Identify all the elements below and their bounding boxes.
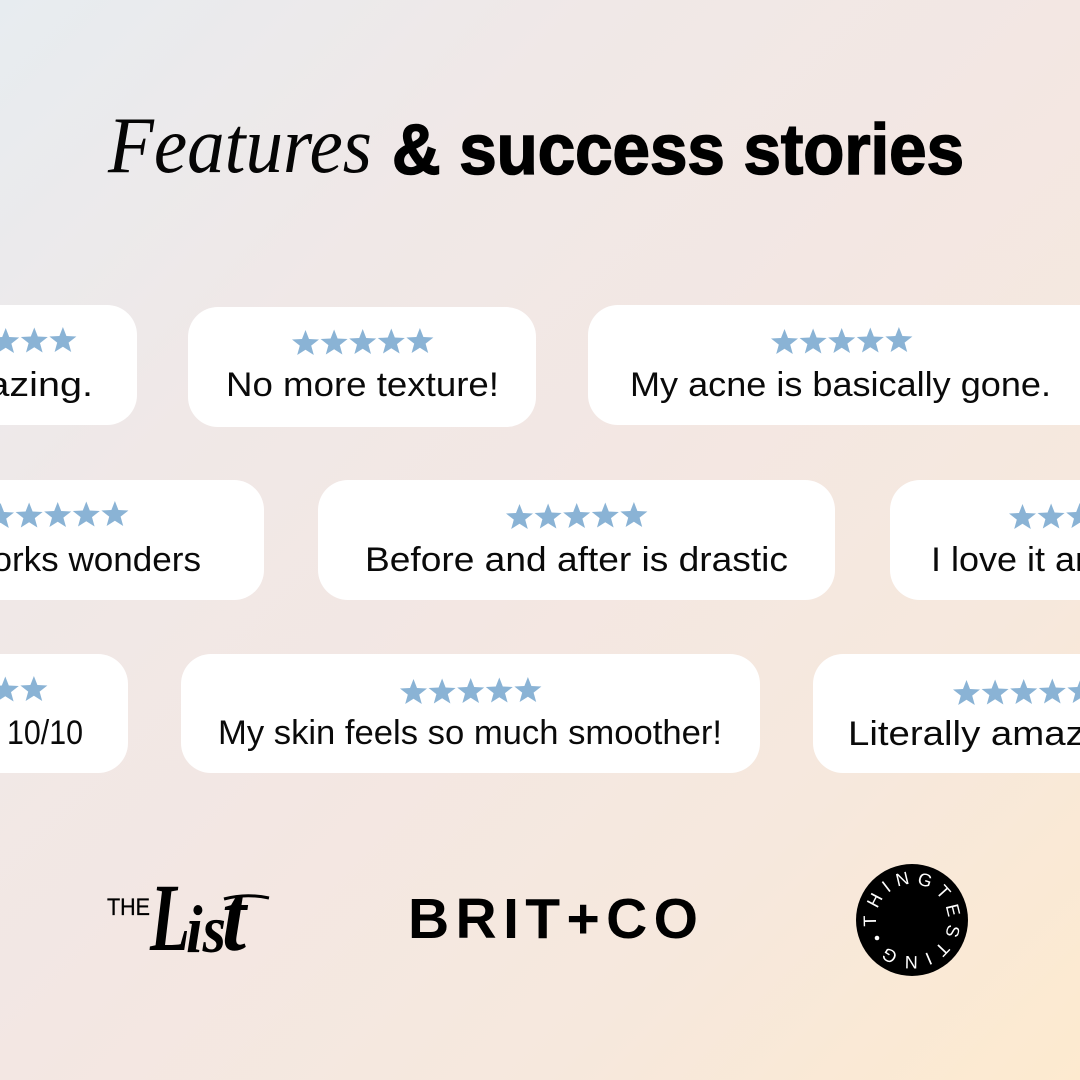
review card: acne gone [588, 305, 1080, 425]
review card: literally amazing [813, 654, 1080, 773]
review card: no more texture [188, 307, 536, 427]
review card: 10/10: 10/10 [7, 714, 83, 752]
logo: Thingtesting badge: THINGTESTING [864, 872, 960, 968]
review row 2 [0, 480, 1080, 600]
logo: The List: . [238, 928, 244, 953]
review card: works wonders [0, 480, 264, 600]
review card: 10/10 [0, 654, 128, 773]
logo: Brit + Co: BRIT+CO [408, 887, 698, 951]
review row 3 [0, 654, 1080, 773]
review card: before and after: Before and after is drastic [365, 541, 788, 579]
review card: smoother skin [181, 654, 760, 773]
review row 1 [0, 305, 1080, 427]
title: Features: Features [107, 102, 372, 190]
review card: smoother skin: My skin feels so much smoother! [218, 714, 722, 752]
review card: amazing [0, 305, 137, 425]
review card: acne gone: My acne is basically gone. [630, 366, 1051, 404]
logo: The List: is [186, 891, 226, 967]
logo: The List: L [149, 864, 190, 971]
title: and success stories: & success stories [392, 111, 964, 190]
logo: The List: THE [107, 894, 150, 921]
review card: no more texture: No more texture! [226, 366, 499, 404]
review card: before and after [318, 480, 835, 600]
review card: love it [890, 480, 1080, 600]
logo: The List: t [222, 864, 248, 972]
logo: The List [107, 864, 269, 972]
title [107, 102, 964, 190]
